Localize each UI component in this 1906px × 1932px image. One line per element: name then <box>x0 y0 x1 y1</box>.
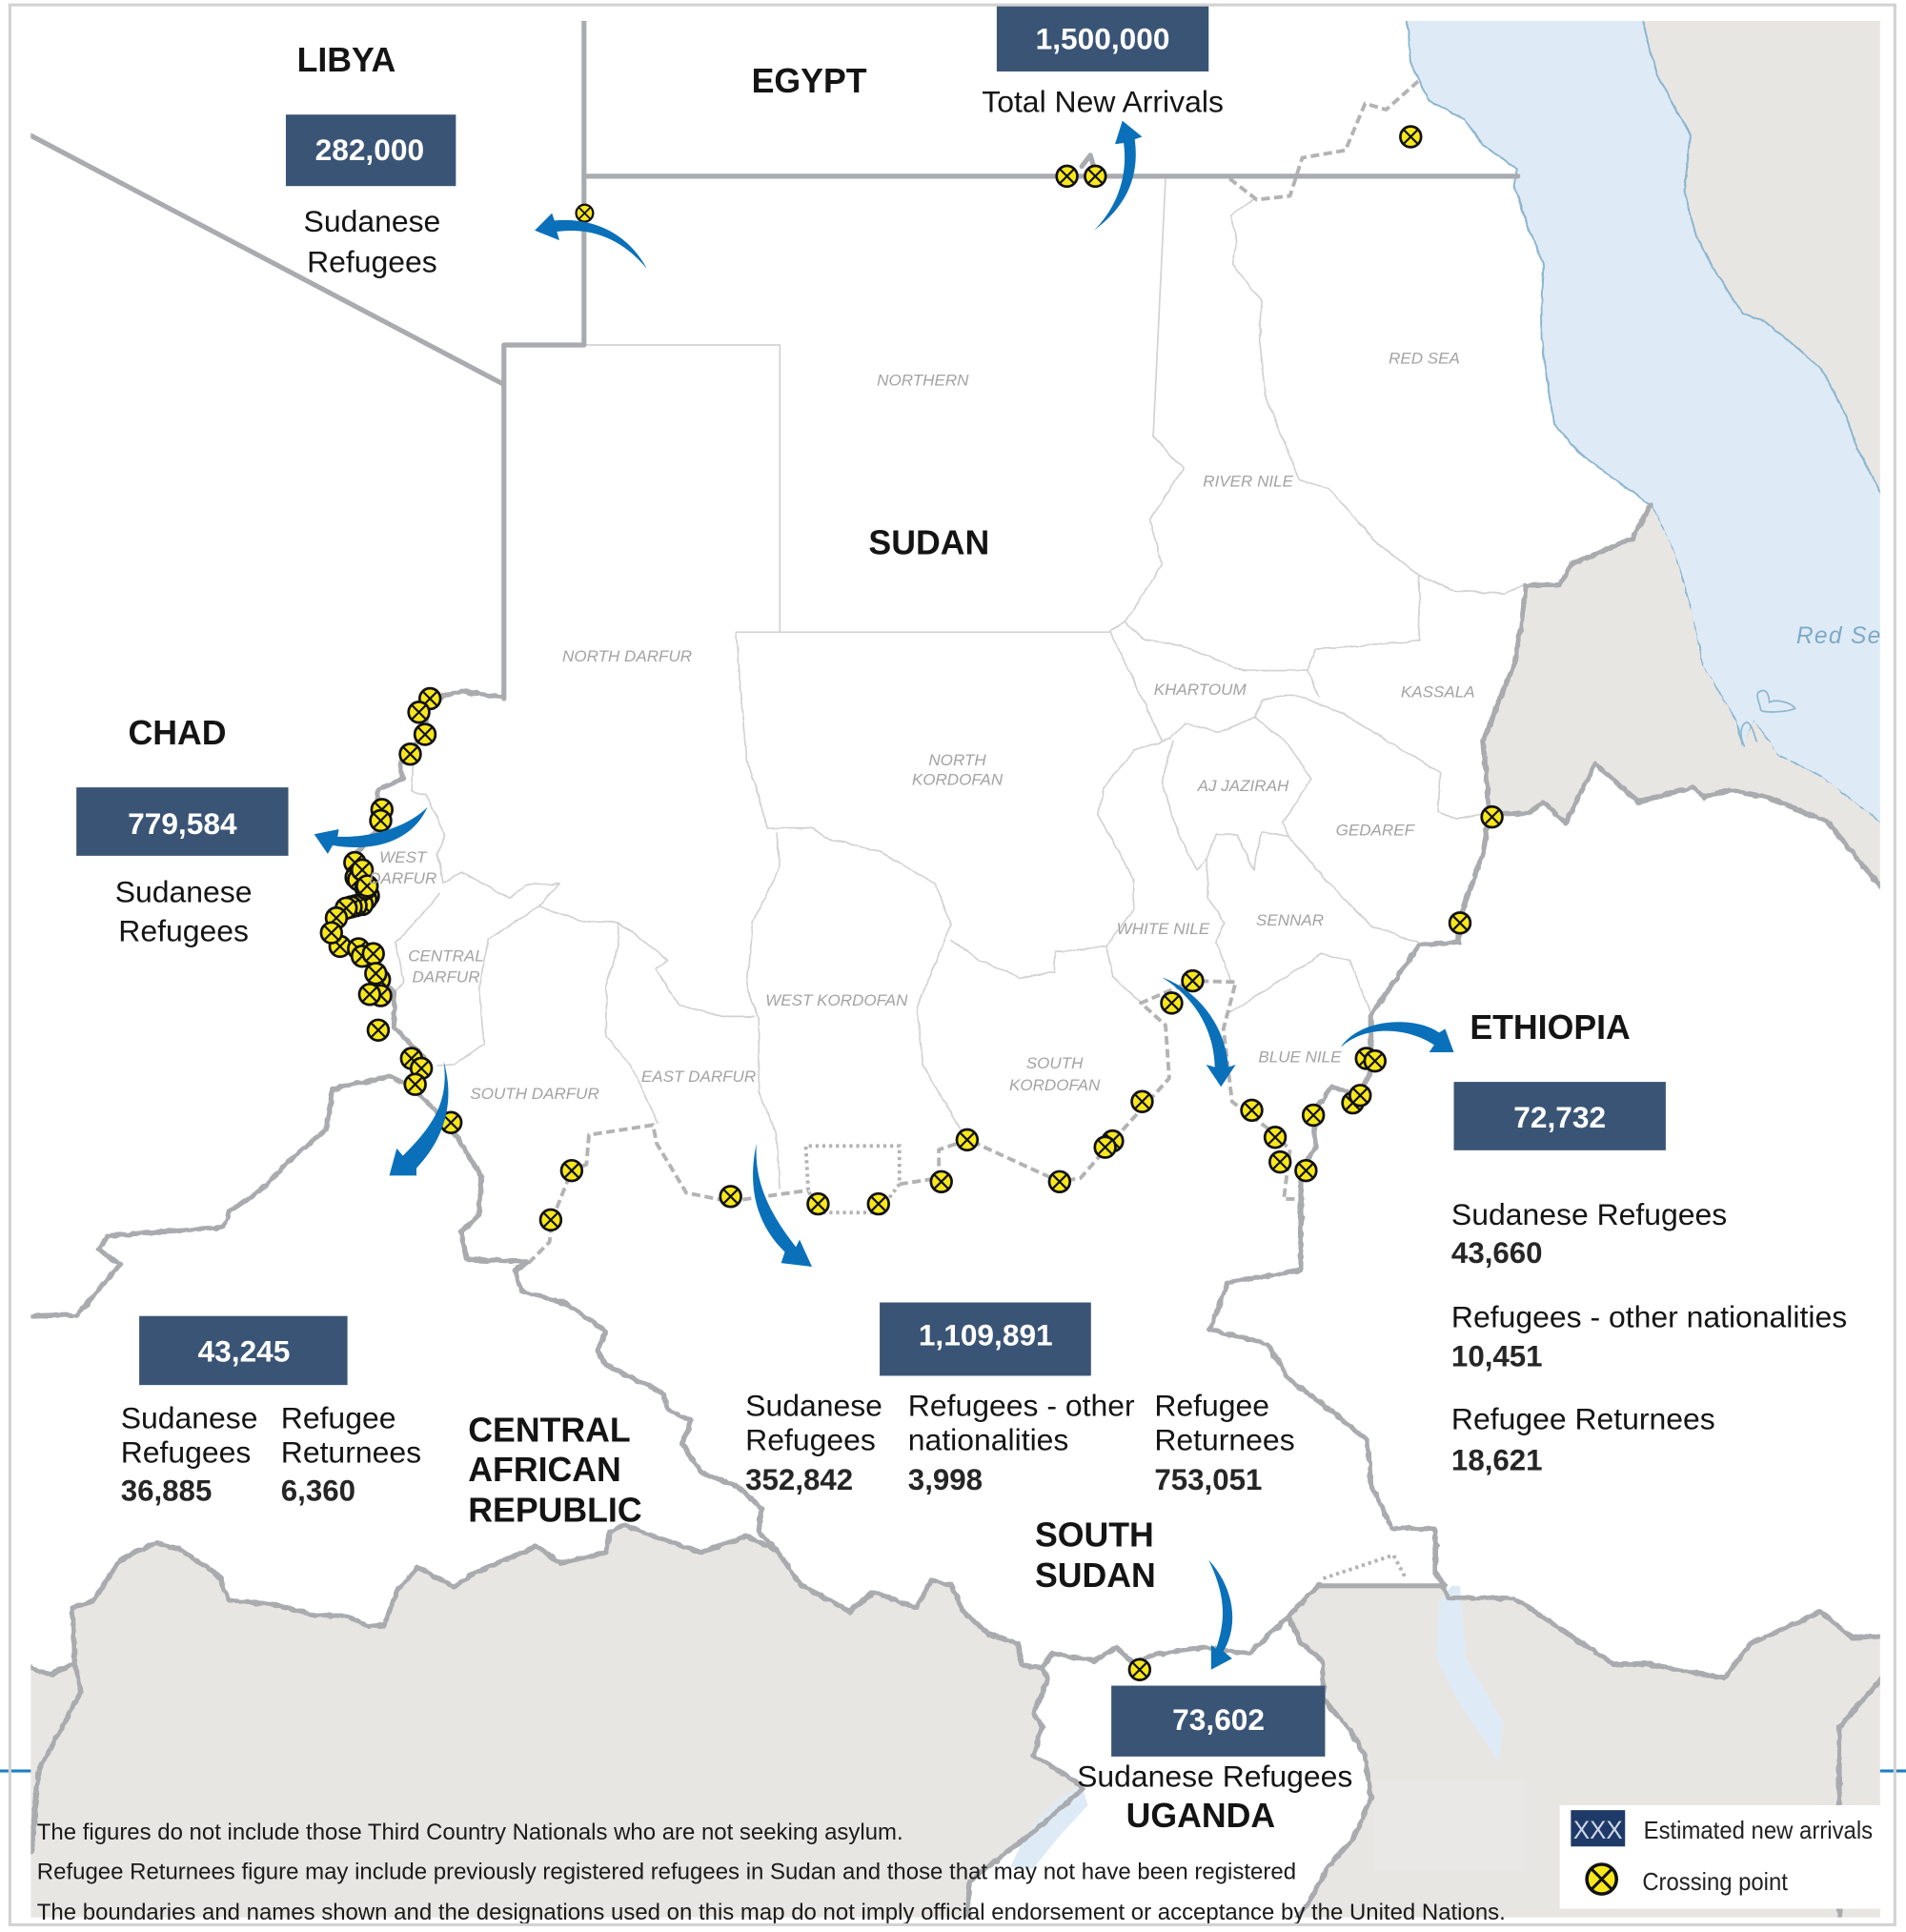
arrow to Egypt <box>1094 121 1142 231</box>
footnotes <box>37 1820 1506 1925</box>
panel: Uganda <box>1077 1686 1352 1835</box>
country name line 2: AFRICAN <box>468 1451 621 1489</box>
value: 3,998 <box>908 1463 983 1496</box>
Lake Turkana <box>1436 1586 1503 1762</box>
state labels: AJ JAZIRAH <box>1197 777 1289 795</box>
state labels: RED SEA <box>1389 349 1460 367</box>
panel: Central African Republic <box>121 1316 642 1530</box>
panel: Ethiopia <box>1451 1008 1847 1476</box>
Abyei dotted box <box>806 1146 900 1212</box>
disputed and undetermined boundaries <box>529 81 1418 1578</box>
faint map patch <box>1373 1780 1524 1870</box>
state labels: DARFUR <box>369 869 436 887</box>
figure: 779,584 <box>128 806 237 841</box>
breakdown line 2: nationalities <box>908 1423 1068 1457</box>
caption line 2: Refugees <box>307 245 437 279</box>
state labels: BLUE NILE <box>1258 1047 1342 1066</box>
country name line 2: SUDAN <box>1035 1556 1156 1595</box>
Red Sea water <box>1407 6 1891 832</box>
Red Sea islands <box>1741 691 1795 746</box>
breakdown line 2: Refugees <box>745 1423 876 1457</box>
value: 18,621 <box>1451 1443 1543 1476</box>
Saudi Arabia land <box>1642 21 1880 494</box>
value: 36,885 <box>121 1474 212 1508</box>
country name: ETHIOPIA <box>1470 1008 1631 1047</box>
value: 6,360 <box>281 1474 355 1508</box>
state labels: EAST DARFUR <box>641 1068 756 1086</box>
figure box <box>139 1316 348 1385</box>
value: 753,051 <box>1154 1463 1262 1496</box>
caption: Sudanese <box>115 874 253 908</box>
caption: Total New Arrivals <box>982 85 1224 119</box>
figure box <box>1454 1082 1666 1150</box>
figure box <box>1111 1686 1325 1757</box>
state labels: WEST <box>379 848 428 866</box>
panel: Egypt <box>752 4 1224 119</box>
breakdown line 2: Returnees <box>281 1435 421 1470</box>
arrow to Chad <box>314 807 428 854</box>
breakdown: Sudanese Refugees <box>1451 1197 1727 1231</box>
value: 43,660 <box>1451 1236 1543 1270</box>
caption: Sudanese Refugees <box>1077 1759 1352 1794</box>
panel: South Sudan <box>745 1303 1295 1595</box>
state labels: WEST KORDOFAN <box>765 991 908 1009</box>
Kenya and south-east land <box>1288 1586 1897 1932</box>
footnote 3: The boundaries and names shown and the designations used on this map do not imply official endorsement or acceptance by the United Nations. <box>37 1900 1506 1925</box>
footnote 1: The figures do not include those Third Country Nationals who are not seeking asylum. <box>37 1820 903 1845</box>
state labels: KHARTOUM <box>1154 681 1247 699</box>
country name: EGYPT <box>752 62 867 100</box>
sea label: Red Sea <box>1796 623 1896 649</box>
arrow from White Nile to South Sudan <box>1162 977 1236 1087</box>
figure: 1,109,891 <box>919 1318 1053 1352</box>
country name: SOUTH <box>1035 1515 1154 1554</box>
figure: 1,500,000 <box>1036 22 1169 56</box>
breakdown: Refugee Returnees <box>1451 1402 1715 1436</box>
figure box <box>286 114 456 186</box>
breakdown line 2: Returnees <box>1154 1423 1295 1457</box>
state labels: SOUTH <box>1026 1054 1084 1072</box>
Ilemi dotted boundary <box>1323 1556 1406 1578</box>
caption: Sudanese <box>304 204 440 238</box>
footnote 2: Refugee Returnees figure may include previously registered refugees in Sudan and those that may not have been registered <box>37 1860 1296 1885</box>
heading: Sudan: SUDAN <box>868 524 989 562</box>
state labels: RIVER NILE <box>1203 473 1294 491</box>
crossing points <box>321 127 1502 1680</box>
breakdown: Refugees - other nationalities <box>1451 1299 1847 1333</box>
state labels <box>369 349 1475 1103</box>
legend background <box>1560 1805 1880 1909</box>
figure box <box>76 787 289 856</box>
value: 352,842 <box>745 1463 853 1496</box>
state labels: SOUTH DARFUR <box>470 1085 599 1103</box>
state labels: KORDOFAN <box>1009 1076 1101 1094</box>
country name line 3: REPUBLIC <box>468 1492 642 1530</box>
country name: CENTRAL <box>468 1412 631 1450</box>
legend text: Estimated new arrivals <box>1644 1818 1873 1844</box>
value: 10,451 <box>1451 1340 1543 1373</box>
state labels: SENNAR <box>1256 911 1324 929</box>
state labels: DARFUR <box>412 967 480 986</box>
Sudan state boundaries <box>395 178 1528 1190</box>
figure: 282,000 <box>315 132 424 167</box>
country name: CHAD <box>128 714 227 752</box>
figure box <box>880 1303 1091 1375</box>
arrows <box>314 121 1454 1670</box>
breakdown: Sudanese refugees: Sudanese <box>121 1400 257 1434</box>
breakdown: Sudanese refugees: Sudanese <box>745 1388 882 1422</box>
state labels: NORTHERN <box>877 372 969 390</box>
figure: 72,732 <box>1513 1100 1606 1134</box>
arrow to Ethiopia <box>1341 1022 1454 1052</box>
country name: UGANDA <box>1126 1797 1275 1835</box>
arrow to Central African Republic <box>390 1061 448 1175</box>
Kordofan and Nile dashed boundary <box>900 981 1300 1199</box>
state labels: NORTH DARFUR <box>562 647 692 665</box>
legend <box>1560 1805 1880 1909</box>
figure box <box>997 4 1208 71</box>
country name: LIBYA <box>297 41 395 79</box>
arrow to Uganda <box>1208 1560 1232 1670</box>
state labels: WHITE NILE <box>1117 920 1210 938</box>
figure: 43,245 <box>198 1334 290 1369</box>
breakdown: other nationalities: Refugees - other <box>908 1388 1135 1422</box>
Sudan and South Sudan dashed boundary <box>529 1125 808 1263</box>
state labels: NORTH <box>928 751 986 769</box>
Halayeb dashed boundary <box>1229 81 1418 199</box>
breakdown: returnees: Refugee <box>1154 1388 1269 1422</box>
arrow to Libya <box>535 214 647 269</box>
DRC and south-west land <box>18 1527 1085 1932</box>
state labels: GEDAREF <box>1336 822 1416 840</box>
panel: Libya <box>286 41 456 279</box>
state labels: KASSALA <box>1401 683 1475 702</box>
Eritrea land <box>1485 506 1891 900</box>
breakdown line 2: Refugees <box>121 1435 251 1470</box>
arrow to South Sudan <box>753 1144 812 1267</box>
legend text: Crossing point <box>1642 1869 1788 1896</box>
state labels: CENTRAL <box>408 946 484 965</box>
state labels: KORDOFAN <box>912 771 1004 789</box>
figure: 73,602 <box>1172 1702 1265 1737</box>
legend swatch: estimated new arrivals: XXX <box>1573 1815 1623 1844</box>
panel: Chad <box>76 714 289 948</box>
Lake Albert <box>1010 1784 1088 1869</box>
legend icon: crossing point <box>1587 1864 1616 1894</box>
caption line 2: Refugees <box>118 914 249 948</box>
breakdown: returnees: Refugee <box>281 1400 395 1434</box>
